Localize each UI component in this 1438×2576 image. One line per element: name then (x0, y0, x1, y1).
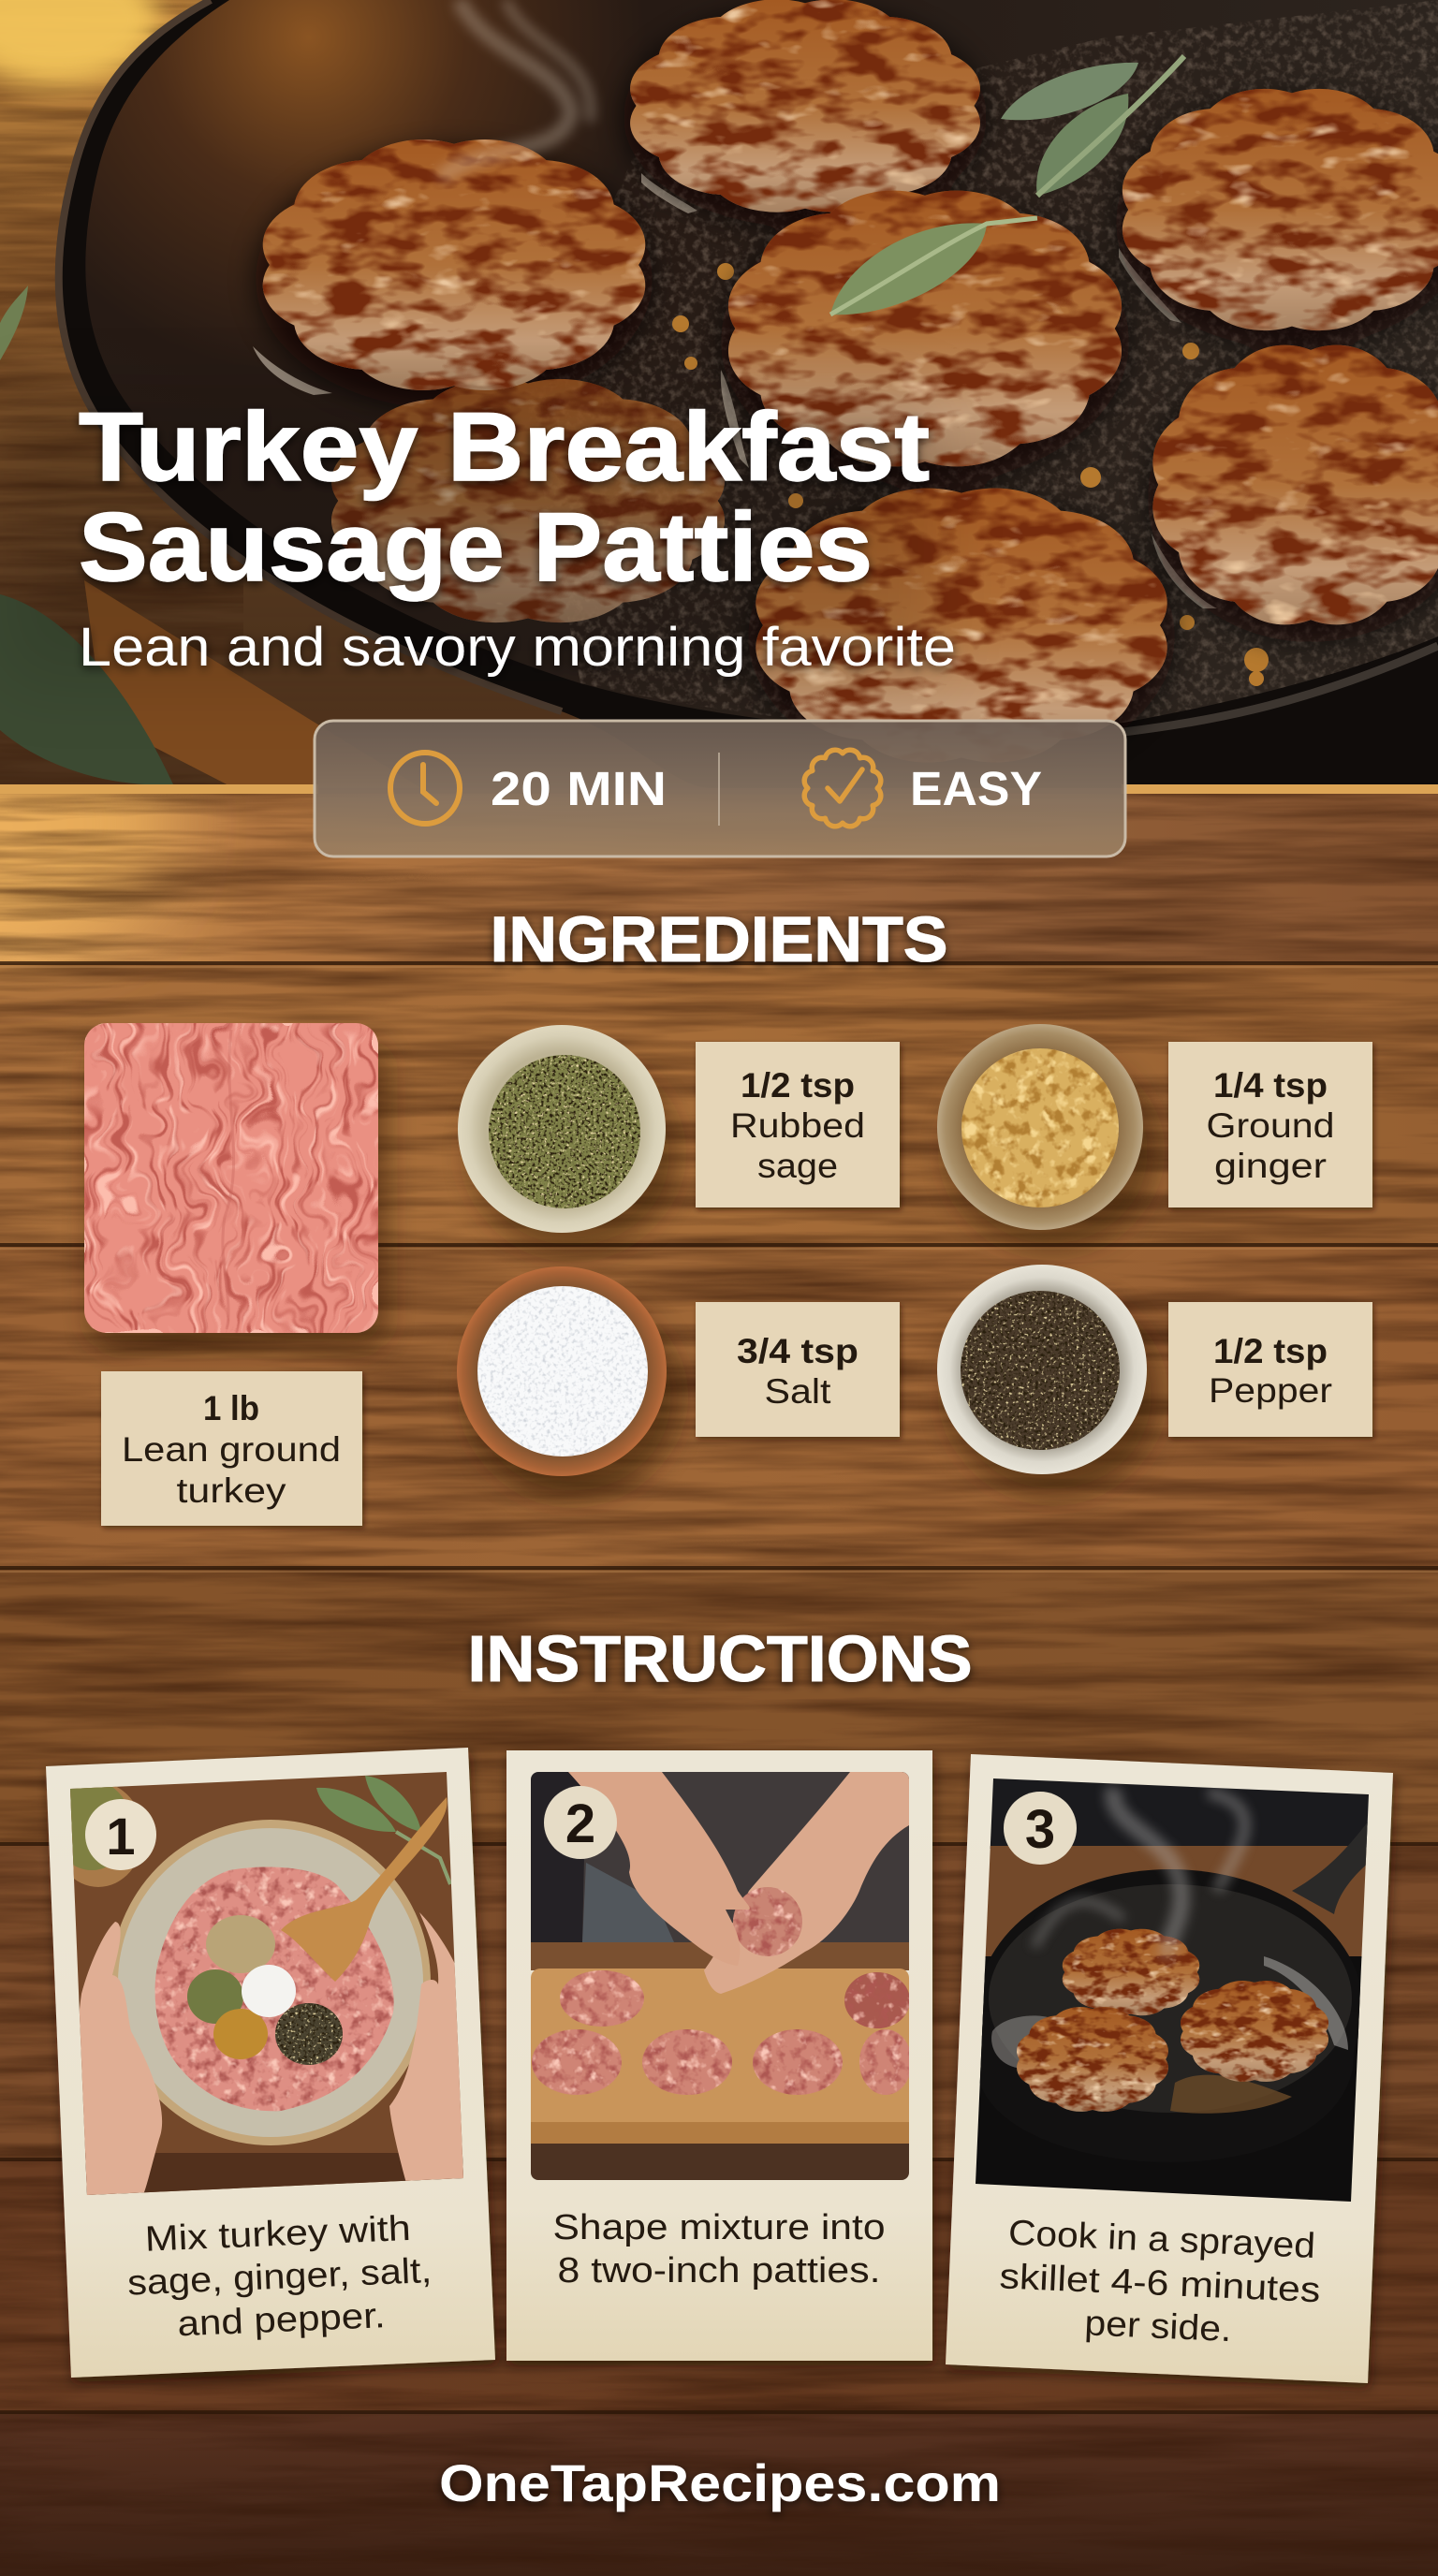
wood table background (0, 693, 1438, 2576)
sage leaf, lower left (0, 594, 173, 784)
step 3 text (997, 2213, 1323, 2353)
step card 1 (46, 1748, 495, 2378)
ingredient: ground ginger bowl (937, 1024, 1156, 1252)
right hand (704, 1772, 909, 1994)
wooden spoon (281, 1797, 448, 1982)
label: ground ginger: ginger (1214, 1147, 1327, 1185)
icon: badge check (804, 750, 881, 827)
right hand (389, 1912, 463, 2187)
step 2 photo: shaping patties (531, 1772, 912, 2181)
small sage leaf, left edge (0, 285, 28, 360)
step 3 text: per side. (1084, 2304, 1232, 2349)
footer: website: OneTapRecipes.com (439, 2453, 1001, 2512)
spice: ginger tan (206, 1915, 275, 1973)
step 3 number badge (1004, 1792, 1077, 1865)
sage leaves (316, 1788, 396, 1832)
patty left (263, 139, 645, 390)
browned bits (1170, 2075, 1292, 2114)
patty bottom (756, 489, 1167, 762)
skillet interior (85, 0, 1438, 733)
hero photo: sausage patties in cast-iron skillet (0, 0, 1438, 788)
label: salt: Salt (764, 1372, 831, 1411)
step 1 text: sage, ginger, salt, (126, 2251, 433, 2304)
ground meat (155, 1866, 394, 2111)
skillet rim highlight (59, 0, 562, 711)
label: pepper: Pepper (1209, 1371, 1332, 1410)
wooden board under skillet (84, 580, 319, 784)
title: Turkey Breakfast (79, 393, 930, 502)
step 2 number badge: 2 (565, 1793, 595, 1854)
bowl (110, 1820, 431, 2145)
glass of oil (0, 0, 159, 84)
step 2 text: Shape mixture into (552, 2208, 886, 2247)
gold divider line left (0, 784, 318, 794)
label: rubbed sage: Rubbed (730, 1106, 865, 1145)
oil shine (991, 2015, 1058, 2069)
patty center (728, 191, 1122, 466)
skillet floor texture (524, 0, 1438, 729)
wood surface behind skillet (0, 0, 580, 784)
step 3 photo: cooking in skillet (969, 1774, 1376, 2209)
step 3 text: skillet 4-6 minutes (999, 2257, 1321, 2310)
spice: turmeric orange (213, 2009, 268, 2059)
label: turkey (101, 1371, 362, 1526)
label: rubbed sage (696, 1042, 900, 1208)
label: turkey: Lean ground (122, 1430, 341, 1469)
label: pepper (1168, 1302, 1372, 1437)
icon: clock (390, 753, 460, 824)
label: ground ginger: Ground (1206, 1106, 1335, 1145)
label: ground ginger: 1/4 tsp (1213, 1066, 1328, 1105)
sage leaves top right (1001, 56, 1184, 196)
cooked patties (1017, 1929, 1328, 2112)
time label: 20 MIN (491, 762, 667, 815)
step 3 text: Cook in a sprayed (1007, 2214, 1316, 2266)
step card 3 (946, 1754, 1393, 2383)
heading: ingredients: INGREDIENTS (491, 903, 947, 975)
steam (440, 0, 591, 178)
step 1 photo: mixing bowl (52, 1760, 477, 2209)
left hand (568, 1772, 750, 1966)
step 3 number badge: 3 (1025, 1799, 1055, 1860)
label: salt: 3/4 tsp (737, 1332, 858, 1370)
left hand (77, 1922, 162, 2200)
patty contact shadows (256, 7, 1438, 779)
label: salt (696, 1302, 900, 1437)
step 1 text: and pepper. (177, 2296, 386, 2344)
heading: instructions: INSTRUCTIONS (468, 1622, 972, 1695)
step 2 text (552, 2208, 886, 2291)
label: ground ginger (1168, 1042, 1372, 1208)
subtitle: Lean and savory morning favorite (79, 617, 956, 678)
step 1 number badge (85, 1799, 156, 1870)
ingredient: salt bowl (457, 1266, 680, 1500)
cutting board (531, 1969, 909, 2144)
raw patties on board (532, 1970, 912, 2095)
steam (1034, 1788, 1245, 1956)
title: Sausage Patties (79, 493, 873, 602)
gold divider line right (1122, 784, 1438, 794)
dim band behind title text (0, 393, 936, 683)
ingredient: rubbed sage bowl (458, 1025, 678, 1254)
step 1 text: Mix turkey with (144, 2209, 411, 2260)
title (79, 393, 930, 602)
patty behind title (331, 379, 725, 622)
step 1 text (125, 2208, 434, 2347)
label: rubbed sage: sage (757, 1147, 838, 1185)
apron (582, 1772, 909, 1942)
pan interior (989, 1884, 1352, 2113)
step 1 number badge: 1 (106, 1807, 136, 1866)
step card 2 (506, 1750, 932, 2361)
patty right top (1123, 89, 1438, 330)
skillet body (59, 0, 1438, 788)
ingredient: pepper bowl (937, 1265, 1160, 1498)
difficulty label: EASY (910, 762, 1042, 815)
sage leaf on center patty (830, 218, 1037, 315)
ingredient: ground turkey block (84, 1023, 389, 1350)
label: rubbed sage: 1/2 tsp (741, 1066, 855, 1105)
label: turkey: 1 lb (203, 1389, 259, 1427)
patty in hands (733, 1887, 802, 1956)
oil glints (253, 173, 1217, 608)
spice: pepper (275, 2003, 343, 2065)
step 2 number badge (544, 1786, 617, 1859)
spice dish behind badge (53, 1782, 143, 1887)
spice: sage green (187, 1969, 243, 2024)
patty top center (630, 0, 980, 212)
browned bits (672, 263, 1269, 686)
info pill: time and difficulty (315, 721, 1125, 856)
spice: salt (242, 1965, 296, 2017)
patty right (1152, 345, 1438, 624)
label: pepper: 1/2 tsp (1213, 1332, 1328, 1370)
pan handle (1292, 1821, 1369, 1914)
pan body (977, 1869, 1363, 2146)
step 2 text: 8 two-inch patties. (558, 2251, 880, 2291)
label: turkey: turkey (176, 1471, 286, 1510)
